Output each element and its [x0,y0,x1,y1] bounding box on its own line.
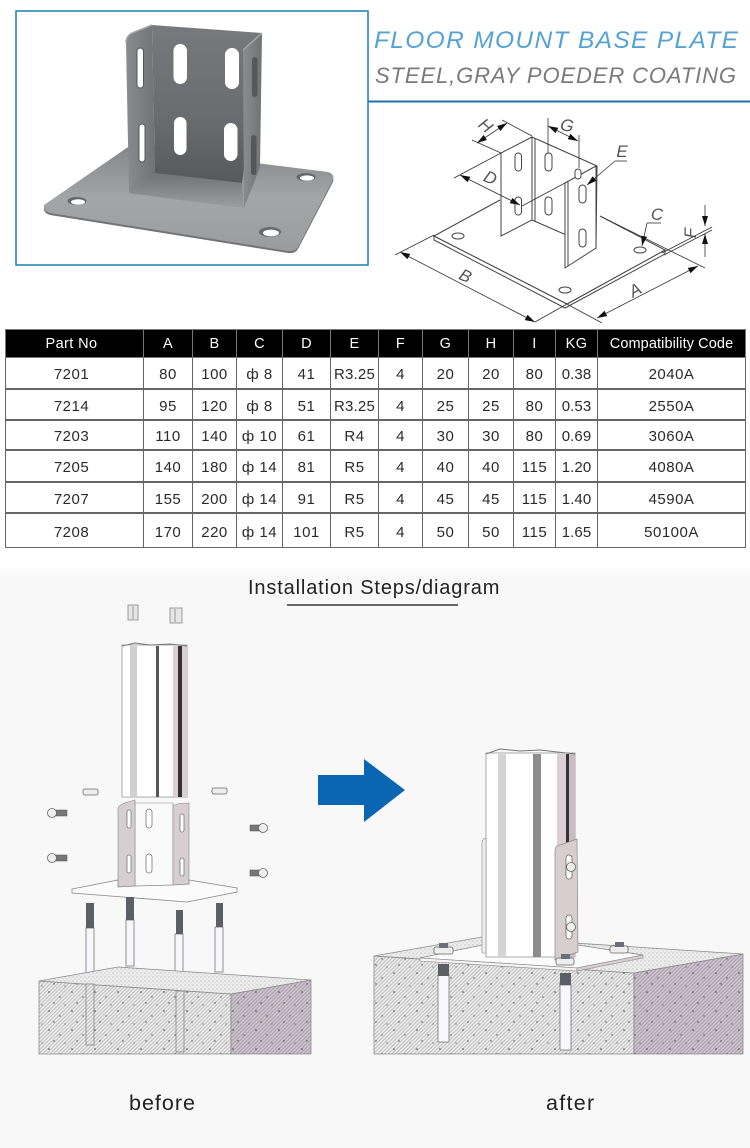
dimension letters [456,115,700,302]
specification table: 80 [526,366,543,383]
specification table: 120 [201,398,228,414]
heading underline [287,604,458,606]
base plate [72,880,237,902]
dimension letters: B [456,265,474,287]
specification table: R3.25 [334,398,375,414]
specification table: 41 [298,366,315,383]
dimension lines [395,118,712,323]
specification table: 45 [482,490,500,508]
specification table: 30 [437,428,454,445]
base plate [420,945,643,971]
dimension letters: C [651,205,664,224]
bracket flanges with bolts [482,838,578,960]
specification table: 180 [201,459,228,476]
subtitle: STEEL,GRAY POEDER COATING [375,63,736,88]
specification table: 0.38 [562,366,591,383]
specification table: 30 [482,428,500,445]
specification table: ф 14 [242,490,277,508]
specification table: 3060A [649,428,694,445]
before: exploded assembly diagram [38,604,312,1054]
specification table: 61 [298,428,315,445]
panel: installation steps background [0,566,750,1148]
specification table: 4 [396,428,405,445]
specification table: 1.40 [562,490,591,508]
aluminium profile [122,643,187,797]
specification table: 4 [396,524,405,541]
specification table: 7207 [54,490,89,508]
specification table: 95 [159,398,177,414]
specification table: 4 [396,459,405,476]
specification table: 4 [396,398,405,414]
base plate outline [434,200,665,308]
specification table [5,329,746,548]
specification table: 45 [437,490,454,508]
specification table: 20 [482,366,500,383]
specification table: 101 [293,524,320,541]
specification table: I [532,336,537,352]
specification table: C [254,336,265,352]
dimension letters: A [625,279,645,302]
specification table: 4 [396,490,405,508]
expansion anchors [86,897,223,979]
specification table: 50100A [644,524,699,541]
specification table: R5 [344,459,365,476]
specification table: 155 [155,490,181,508]
specification table: R5 [344,490,365,508]
specification table: 2550A [649,398,694,414]
photo panel: base plate product photo [15,10,369,266]
specification table: 110 [155,428,181,445]
specification table: 115 [522,490,547,508]
specification table: D [301,336,312,352]
specification table: F [396,336,405,352]
label: after: after [546,1091,596,1115]
dimension letters: F [681,226,700,238]
specification table: B [209,336,220,352]
specification table: Part No [46,336,97,352]
dimension letters: G [559,115,575,136]
specification table: ф 8 [246,398,273,414]
specification table: 140 [155,459,181,476]
specification table: 7205 [54,459,89,476]
specification table: 91 [298,490,315,508]
screws and nuts [48,788,268,878]
specification table: 4590A [649,490,694,508]
specification table: 0.69 [562,428,591,445]
specification table: 7208 [54,524,89,541]
after: assembled diagram [374,748,744,1054]
specification table: 81 [298,459,315,476]
specification table: 80 [159,366,177,383]
technical dimension drawing [394,115,712,324]
base plate [44,147,333,253]
specification table: G [440,336,451,352]
specification table: 50 [437,524,454,541]
title: FLOOR MOUNT BASE PLATE [374,27,739,54]
specification table: 140 [201,428,228,445]
specification table: ф 14 [242,524,277,541]
specification table: 20 [437,366,454,383]
specification table: R5 [344,524,365,541]
specification table: 2040A [649,366,694,383]
dimension letters: H [475,115,497,137]
specification table: 1.65 [562,524,591,541]
specification table: 1.20 [562,459,591,476]
bracket outline [501,137,597,268]
dimension letters: E [616,142,628,161]
T-nuts top [128,605,182,623]
specification table: 40 [437,459,454,476]
specification table: 7201 [54,366,89,383]
specification table: 7214 [54,398,89,414]
specification table: 80 [526,428,543,445]
heading: installation steps: Installation Steps/diagram [248,577,500,599]
specification table: 51 [298,398,315,414]
specification table: E [349,336,360,352]
specification table: R4 [344,428,365,445]
specification table: 100 [201,366,228,383]
specification table: ф 8 [246,366,273,383]
concrete block [39,967,311,1054]
specification table: 220 [201,524,228,541]
specification table: 25 [482,398,500,414]
upright bracket [126,25,262,208]
specification table: 4 [396,366,405,383]
specification table: 50 [482,524,500,541]
specification table: 7203 [54,428,89,445]
specification table: 0.53 [562,398,591,414]
specification table: 4080A [649,459,694,476]
header: title and subtitle [368,27,750,102]
specification table: 200 [201,490,228,508]
specification table: 40 [482,459,500,476]
dimension letters: D [481,167,500,189]
concrete block [374,937,743,1054]
specification table: A [163,336,173,352]
arrow: before to after [318,759,405,822]
specification table: R3.25 [334,366,375,383]
aluminium profile [486,749,575,957]
label: before: before [129,1091,196,1115]
specification table: 115 [522,459,547,476]
specification table: ф 14 [242,459,277,476]
specification table: H [486,336,496,352]
specification table: KG [566,336,587,352]
specification table: Compatibility Code [610,336,733,352]
specification table: 80 [526,398,543,414]
bracket [118,800,189,890]
specification table: 25 [437,398,454,414]
specification table: 115 [522,524,547,541]
anchor bolts and nuts [434,942,628,1050]
specification table: 170 [155,524,181,541]
specification table: ф 10 [242,428,277,445]
